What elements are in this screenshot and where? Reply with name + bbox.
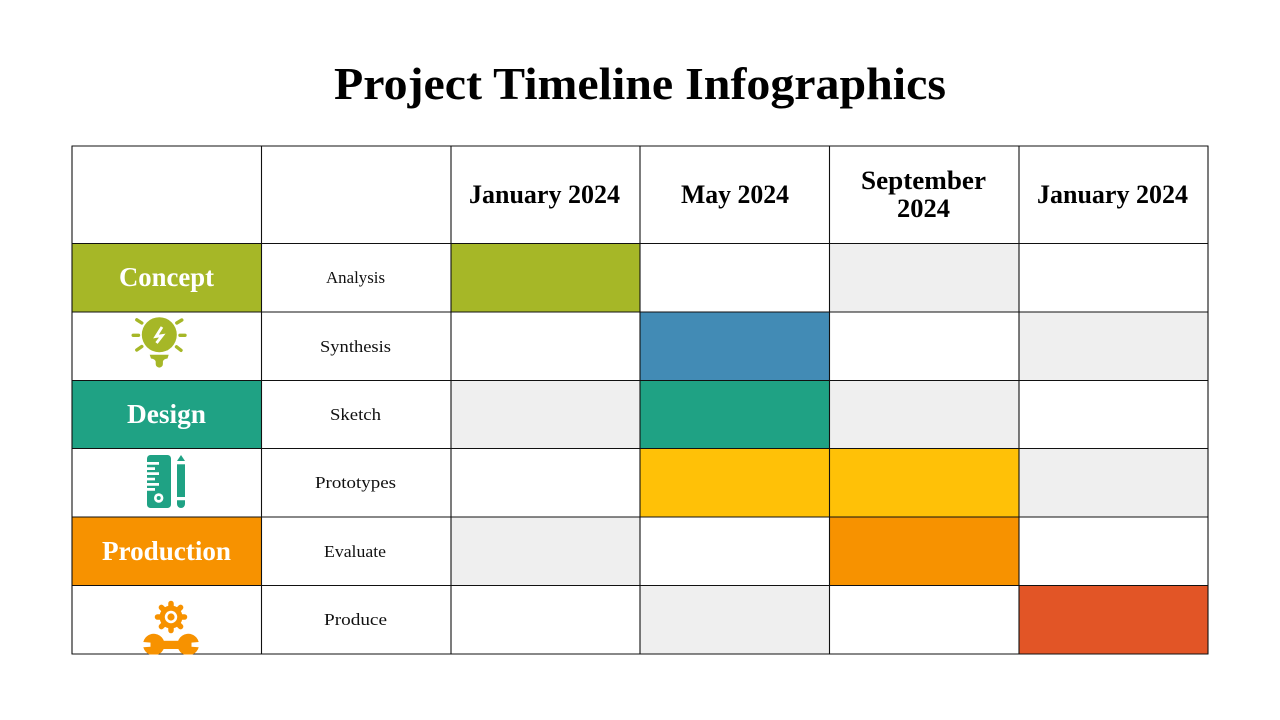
column heading: May 2024: May 2024	[681, 180, 789, 209]
phase label: Concept: Concept	[119, 262, 214, 292]
task: Produce: Produce	[324, 610, 387, 629]
task: Synthesis: Synthesis	[320, 337, 391, 356]
column heading: January 2024: January 2024	[469, 180, 620, 209]
task: Analysis: Analysis	[326, 268, 385, 287]
task: Evaluate: Evaluate	[324, 542, 386, 561]
column heading: September 2024	[861, 166, 986, 223]
task: Prototypes: Prototypes	[315, 473, 396, 492]
icon: gear and wrench	[143, 600, 199, 654]
column heading: September 2024: 2024	[897, 194, 950, 223]
cell fills: schedule bars and grey blocks	[72, 244, 1208, 654]
phase label: Design: Design	[127, 399, 206, 429]
column heading: January 2024 (second): January 2024	[1037, 180, 1188, 209]
title: Project Timeline Infographics	[334, 58, 946, 109]
timeline table	[72, 146, 1208, 654]
icon: light bulb	[133, 317, 185, 368]
task: Sketch: Sketch	[330, 405, 382, 424]
phase label: Production: Production	[102, 536, 231, 566]
column heading: September 2024: September	[861, 166, 986, 195]
icon: ruler and pencil	[147, 455, 185, 508]
